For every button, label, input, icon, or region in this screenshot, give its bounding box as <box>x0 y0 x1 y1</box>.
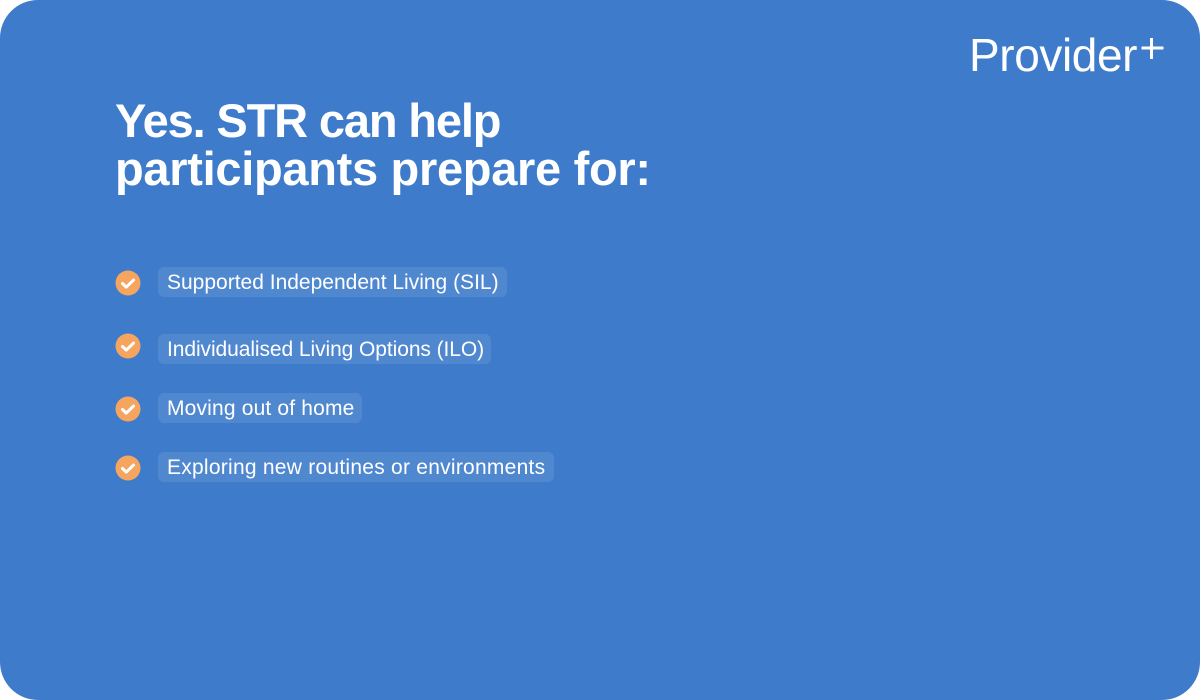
title: participants prepare for: <box>115 142 651 195</box>
list item: Individualised Living Options <box>116 334 491 364</box>
icon: check badge <box>116 334 140 358</box>
label: Supported Independent Living (SIL) <box>167 271 499 294</box>
label: Moving out of home <box>167 397 354 420</box>
list item: Exploring new routines <box>116 452 554 482</box>
icon: check badge <box>116 270 140 296</box>
logo: Provider+: Provider <box>969 29 1137 81</box>
label: Exploring new routines or environments <box>167 456 545 479</box>
list item: Moving out of home <box>116 393 362 423</box>
icon: check badge <box>116 396 140 422</box>
label: Individualised Living Options (ILO) <box>167 338 484 361</box>
list item: Supported Independent Living <box>116 267 507 297</box>
title: Yes. STR can help <box>115 94 500 147</box>
icon: check badge <box>116 456 140 480</box>
title <box>115 94 651 195</box>
